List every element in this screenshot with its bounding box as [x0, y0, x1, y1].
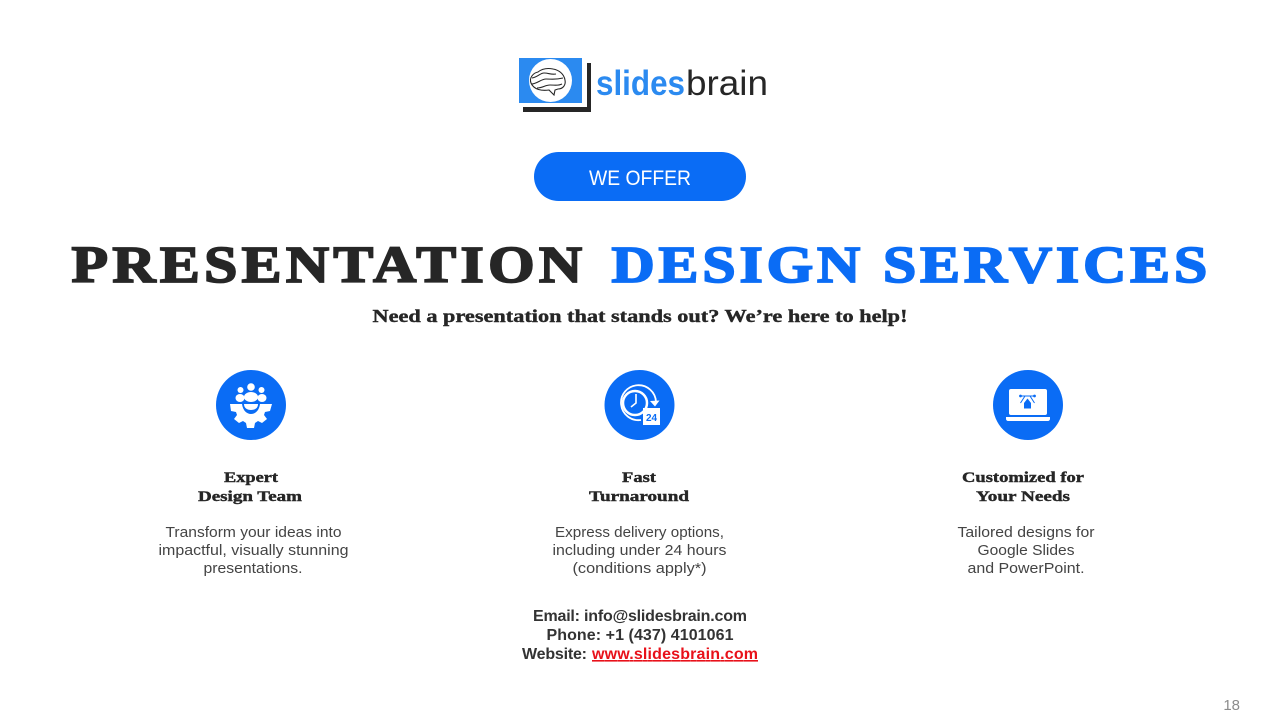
description: Google Slides	[978, 543, 1074, 559]
icon: laptop with pen tool	[993, 370, 1063, 440]
contact details: www.slidesbrain.com	[591, 646, 758, 663]
heading: Customized for	[962, 470, 1085, 486]
icon: team and gear	[216, 370, 286, 440]
description: Transform your ideas into	[166, 525, 342, 541]
description: including under 24 hours	[552, 543, 726, 559]
logo: slidesbrain	[519, 58, 768, 112]
title: PRESENTATION	[72, 237, 582, 294]
icon: clock with 24 calendar: 24	[646, 413, 657, 424]
column: customized for your needs	[958, 370, 1095, 577]
description: (conditions apply*)	[572, 561, 706, 577]
heading: Fast	[622, 470, 656, 486]
logo wordmark: brain	[686, 64, 768, 103]
subtitle: Need a presentation that stands out? We’re here to help!	[372, 306, 908, 326]
heading: Design Team	[198, 489, 302, 505]
column: fast turnaround	[552, 370, 726, 577]
logo icon: brain in blue square	[519, 58, 591, 112]
title	[72, 237, 1207, 294]
heading: Expert	[224, 470, 278, 486]
description: Express delivery options,	[555, 525, 724, 541]
badge: we offer	[534, 152, 746, 201]
contact details: Website:	[522, 646, 587, 663]
heading: Turnaround	[589, 489, 689, 505]
icon: clock with 24 calendar	[604, 370, 674, 440]
contact details: Email: info@slidesbrain.com	[533, 608, 747, 625]
description: Tailored designs for	[958, 525, 1095, 541]
title: DESIGN SERVICES	[612, 237, 1207, 294]
description: presentations.	[204, 561, 302, 577]
heading: Your Needs	[976, 489, 1070, 505]
description: impactful, visually stunning	[158, 543, 348, 559]
contact details: Phone: +1 (437) 4101061	[546, 627, 734, 644]
page number: 18	[1223, 697, 1240, 714]
badge: we offer: WE OFFER	[589, 167, 691, 190]
logo wordmark	[596, 64, 768, 103]
column: expert design team	[158, 370, 348, 577]
contact details	[522, 608, 758, 663]
description: and PowerPoint.	[968, 561, 1084, 577]
logo wordmark: slides	[596, 64, 685, 103]
